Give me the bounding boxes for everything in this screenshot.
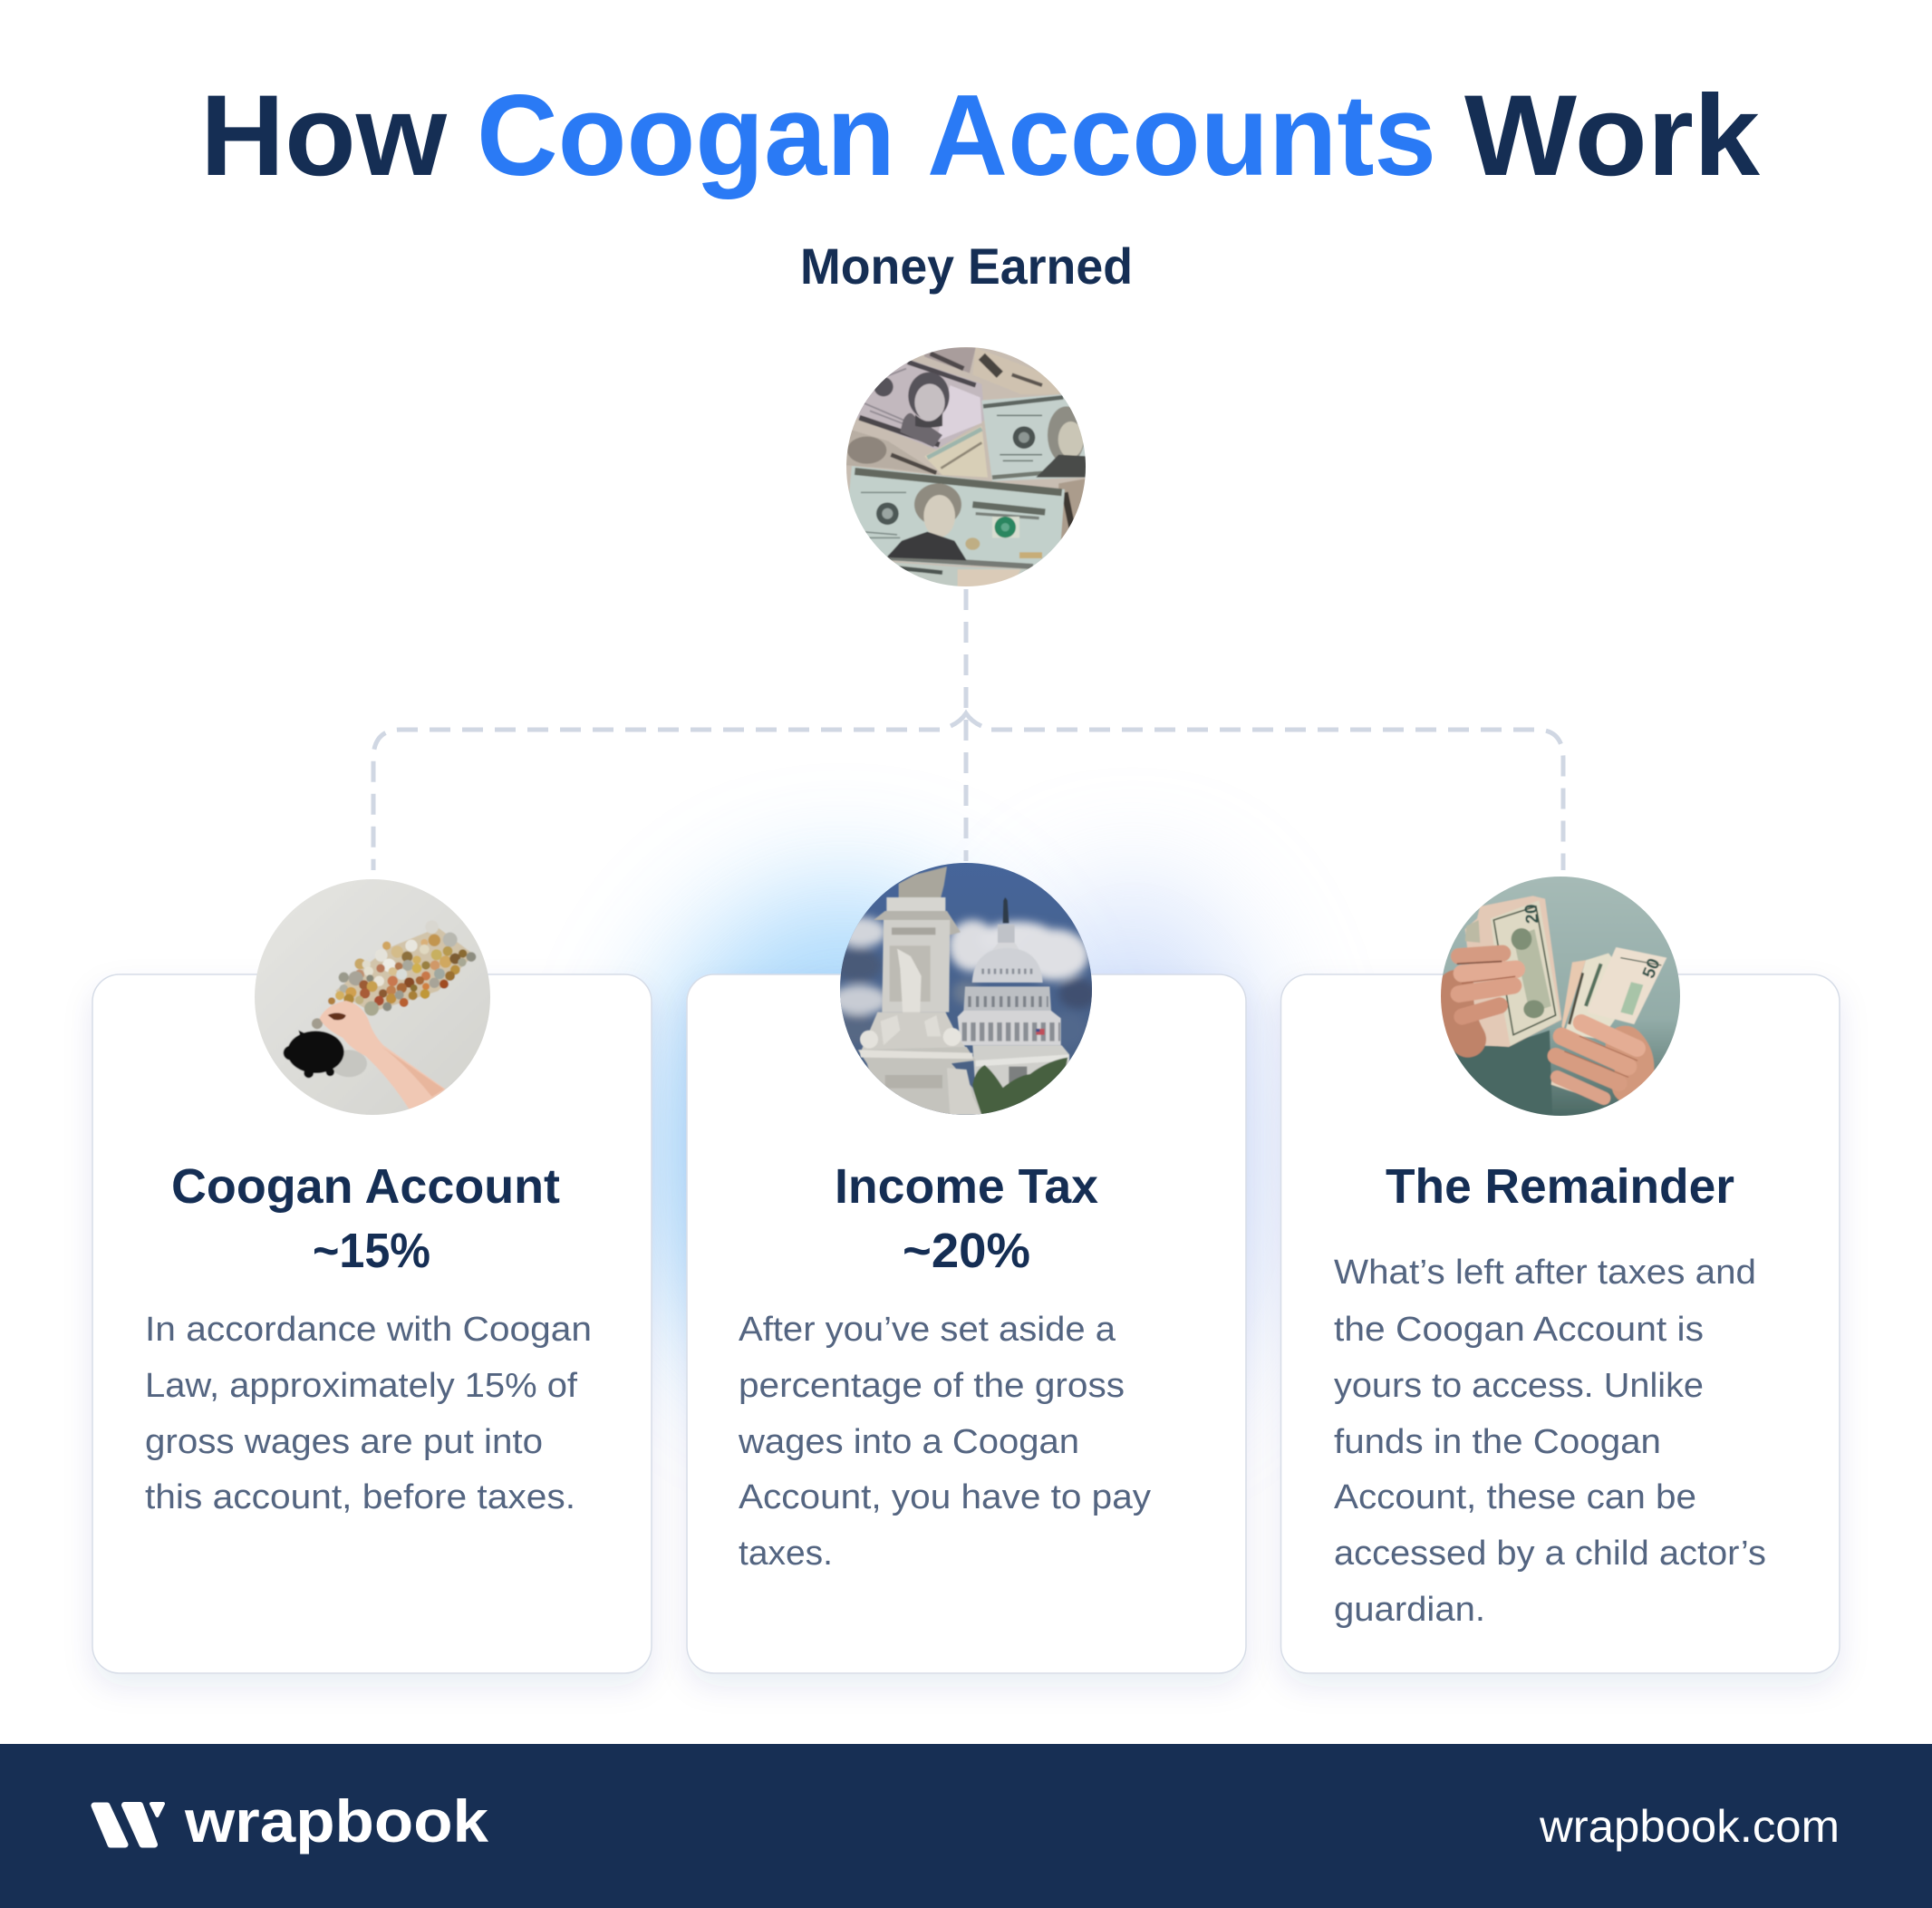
arm and hand — [320, 1001, 446, 1109]
body text: coogan account: this account, before taxes. — [145, 1478, 575, 1516]
body text: income tax: After you’ve set aside a — [739, 1311, 1116, 1349]
body text: the remainder: yours to access. Unlike — [1334, 1367, 1704, 1405]
capitol dome — [958, 897, 1069, 1094]
website url: wrapbook.com — [1539, 1801, 1840, 1852]
heading: the remainder: The Remainder — [1386, 1159, 1734, 1214]
heading: income tax: Income Tax — [835, 1159, 1098, 1214]
title: Coogan — [477, 71, 895, 199]
body text: the remainder: the Coogan Account is — [1334, 1311, 1704, 1349]
title: How — [200, 71, 448, 199]
percent: 20: ~20% — [903, 1224, 1030, 1278]
body text: income tax — [738, 1311, 1151, 1573]
trees — [972, 1058, 1067, 1115]
left hand — [1455, 954, 1516, 1040]
body text: the remainder: Account, these can be — [1334, 1478, 1696, 1516]
piggy bank — [284, 1031, 344, 1078]
body text: coogan account: Law, approximately 15% of — [145, 1367, 577, 1405]
body text: coogan account: gross wages are put into — [145, 1423, 543, 1461]
body text: income tax: taxes. — [739, 1535, 833, 1573]
title: Work — [1464, 71, 1760, 199]
background glow — [639, 888, 1269, 1405]
title: Accounts — [927, 71, 1436, 199]
heading: money earned: Money Earned — [800, 237, 1133, 295]
coins — [328, 920, 476, 1016]
monument — [858, 867, 981, 1115]
body text: income tax: Account, you have to pay — [739, 1478, 1151, 1516]
panel: coogan account — [92, 974, 652, 1673]
title — [200, 71, 1760, 199]
photo: hands holding cash — [1441, 877, 1680, 1116]
heading: coogan account: Coogan Account — [171, 1159, 560, 1214]
body text: income tax: wages into a Coogan — [738, 1423, 1079, 1461]
body text: coogan account: In accordance with Coogan — [145, 1311, 592, 1349]
footer bar — [0, 1744, 1932, 1908]
body text: the remainder: guardian. — [1334, 1591, 1485, 1629]
right stack of bills — [1561, 947, 1666, 1040]
body text: the remainder: What’s left after taxes and — [1334, 1254, 1756, 1292]
right stack of bills: 50 — [1639, 956, 1665, 982]
percent: 15: ~15% — [313, 1224, 430, 1278]
body text: the remainder: accessed by a child actor’s — [1334, 1535, 1766, 1573]
left stack of bills: 20 — [1522, 903, 1542, 925]
panel: the remainder — [1281, 974, 1840, 1673]
logo mark — [94, 1804, 163, 1845]
body text: the remainder: funds in the Coogan — [1334, 1423, 1661, 1461]
dashed connectors — [373, 589, 1563, 870]
body text: income tax: percentage of the gross — [739, 1367, 1125, 1405]
left stack of bills — [1465, 896, 1561, 1047]
photo: piggy bank and coins — [255, 879, 490, 1115]
logo wordmark: wrapbook — [184, 1787, 488, 1855]
photo: dollar bills — [846, 347, 1086, 586]
panel: income tax — [687, 974, 1246, 1673]
right hand — [1551, 1022, 1637, 1099]
photo: capitol and monument — [840, 863, 1092, 1115]
body text: coogan account — [145, 1311, 592, 1516]
body text: the remainder — [1334, 1254, 1766, 1629]
